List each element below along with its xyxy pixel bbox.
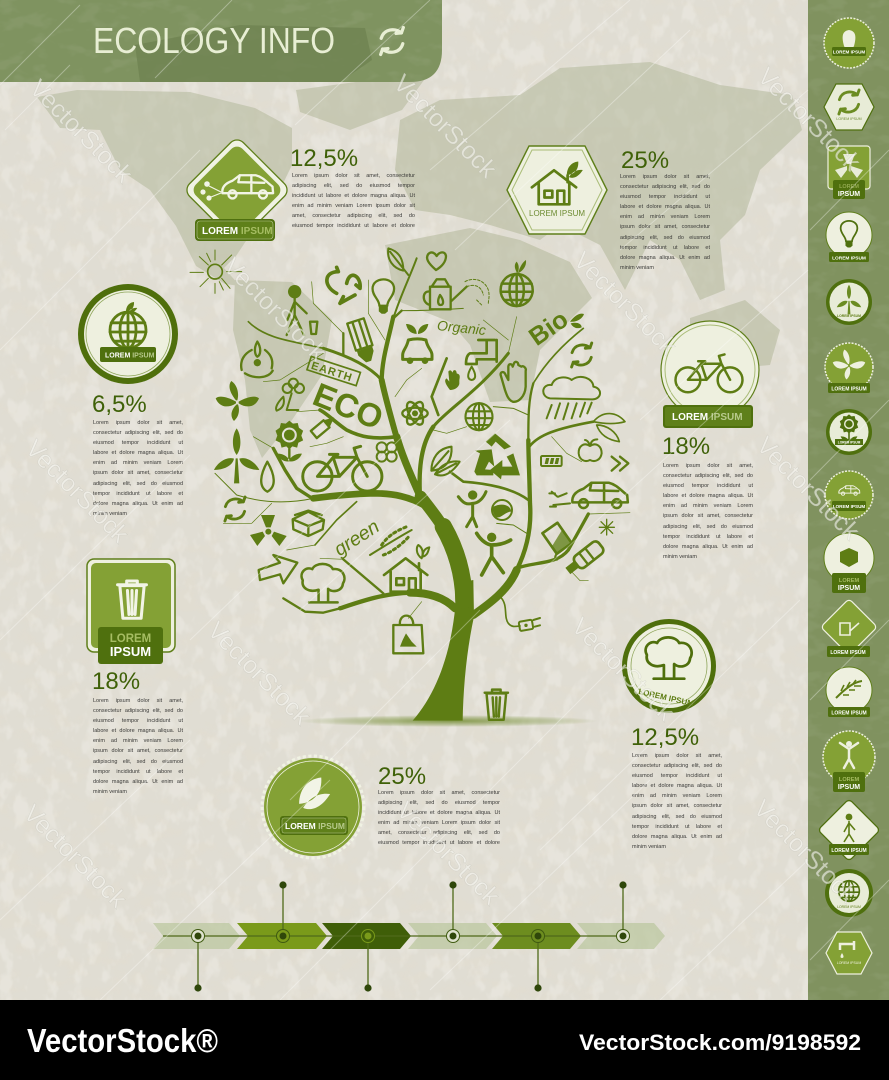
icon: plug: [501, 597, 540, 631]
icon: recycle three leaves: [241, 342, 273, 377]
text: enim ad minim veniam Lorem: [632, 793, 722, 799]
sidebar badge: flower ring: [826, 409, 872, 455]
stat: 25% bottom: 25%: [378, 763, 426, 790]
icon: apple: [579, 439, 602, 461]
badge: leaves seal: [262, 756, 364, 858]
icon: bicycle: [676, 354, 742, 392]
text: dolore magna aliqua. Ut enim ad: [93, 779, 183, 785]
label: IPSUM: [110, 644, 151, 659]
icon: atom flower: [402, 400, 428, 427]
sidebar badge: globe ring: LOREM IPSUM: [837, 905, 861, 909]
text: eiusmod tempor incididunt ut: [632, 773, 722, 779]
watermark overlay: VectorStock: [391, 796, 505, 911]
text: adipiscing elit, sed do eiusmod: [632, 814, 722, 820]
icon: butterfly: [216, 381, 259, 421]
header panel: [0, 0, 442, 82]
text: enim ad minim veniam Lorem: [620, 214, 710, 220]
badge: globe circle: [78, 284, 178, 384]
sidebar badge: recycle hexagon: [824, 84, 874, 130]
icon: box: [293, 511, 324, 536]
icon: recycle triangle: [474, 433, 520, 479]
watermark overlay: VectorStock: [568, 246, 682, 361]
text: minim veniam: [93, 511, 127, 517]
text: adipiscing elit, sed do eiusmod: [663, 524, 753, 530]
watermark overlay: VectorStock: [24, 74, 138, 189]
text: ipsum dolor sit amet, consectetur: [632, 803, 722, 809]
sidebar badge: faucet hexagon: [826, 932, 872, 974]
icon: house: [384, 558, 427, 592]
stat: 6,5%: [92, 391, 183, 517]
icon: car: [222, 175, 273, 198]
text: Lorem ipsum dolor sit amet,: [93, 698, 183, 704]
label: [98, 627, 163, 664]
icon: yin yang: [492, 500, 512, 520]
icon: bicycle: [303, 446, 382, 491]
stat: 25% top: [620, 147, 710, 271]
icon: chevrons: [612, 457, 628, 471]
sidebar badge: leaf circle: [826, 667, 872, 717]
text: ipsum dolor sit amet, consectetur: [663, 513, 753, 519]
text: Lorem ipsum dolor sit amet, consectetur: [292, 173, 415, 179]
icon: leaves: [431, 447, 460, 475]
sidebar badge: globe ring: [825, 869, 873, 917]
text: Organic: Organic: [436, 317, 487, 338]
text: Bio: Bio: [524, 305, 574, 352]
icon: globe with apple leaf: [501, 260, 533, 306]
text: dolore magna aliqua. Ut enim ad: [93, 501, 183, 507]
sidebar panel: [808, 0, 889, 1000]
icon: branch leaves: [593, 414, 625, 442]
sidebar badge: box circle: IPSUM: [838, 585, 860, 592]
text: enim ad minim veniam Lorem: [93, 460, 183, 466]
text: incididunt ut labore et dolore magna aliqua. Ut: [292, 193, 415, 199]
text: labore et dolore magna aliqua. Ut: [632, 783, 722, 789]
stamp: EARTH: [307, 356, 360, 386]
icon: house: [532, 170, 576, 204]
sidebar badge: butterfly seal: [825, 343, 873, 393]
icon: pencil: [311, 414, 337, 438]
icon: battery roll: [563, 540, 605, 577]
badge: house hexagon: [507, 146, 607, 234]
label: LOREM: [110, 633, 151, 645]
text: eiusmod tempor incididunt ut labore et dolore: [378, 840, 500, 846]
icon: radiation: [250, 515, 287, 546]
watermark overlay: VectorStock: [20, 434, 134, 549]
icon: solid hand: [445, 370, 460, 390]
text: tempor incididunt ut labore et: [620, 245, 710, 251]
icon: drop: [261, 462, 274, 492]
text: enim ad minim veniam Lorem ipsum dolor sit: [292, 203, 415, 209]
stat: 12,5% bottom: [631, 724, 722, 850]
text: incididunt ut labore et dolore magna aliqua. Ut: [378, 810, 500, 816]
sidebar badge: bulb circle: LOREM IPSUM: [832, 256, 866, 262]
label: LOREM IPSUM: [105, 352, 155, 360]
sidebar badge: car seal: LOREM IPSUM: [833, 504, 865, 509]
text: labore et dolore magna aliqua. Ut: [93, 450, 183, 456]
icon: heart: [427, 252, 446, 270]
text: tempor incididunt ut labore et: [663, 534, 753, 540]
tree trunk and branches: [215, 258, 630, 721]
badge: tree circle: [622, 619, 716, 713]
icon: flowers: [549, 492, 570, 507]
icon: leaf: [126, 302, 137, 314]
icon: globe: [110, 312, 146, 348]
text: Lorem ipsum dolor sit amet,: [663, 463, 753, 469]
icon: sun: [190, 250, 242, 293]
sidebar badge: faucet hexagon: LOREM IPSUM: [837, 961, 861, 965]
text: enim ad minim veniam Lorem: [93, 738, 183, 744]
icon: trash can: [485, 690, 508, 720]
icon: person dancing: [477, 533, 511, 575]
sidebar badge: flower ring: LOREM IPSUM: [838, 441, 861, 445]
icon: watering can: [424, 279, 467, 309]
stat: 18% left: 18%: [92, 668, 140, 695]
stat: 25% top: 25%: [621, 147, 669, 174]
text: consectetur adipiscing elit, sed do: [93, 708, 183, 714]
text: adipiscing elit, sed do eiusmod tempor: [292, 183, 415, 189]
text: minim veniam: [663, 554, 697, 560]
stat: 6,5%: 6,5%: [92, 391, 147, 418]
sidebar badge: recycle hexagon: LOREM IPSUM: [836, 117, 862, 121]
watermark overlay: VectorStock: [751, 431, 865, 546]
icon: arrow: [259, 555, 297, 583]
text: consectetur adipiscing elit, sed do: [663, 473, 753, 479]
icon: recycle heart: [327, 267, 360, 303]
icon: recycle arrows: [381, 28, 403, 54]
text: consectetur adipiscing elit, sed do: [632, 763, 722, 769]
stat: 18% right: 18%: [662, 433, 710, 460]
icon: tree: [646, 637, 692, 679]
text: labore et dolore magna aliqua. Ut: [93, 728, 183, 734]
icon: globe small: [465, 403, 492, 430]
text: amet, consectetur adipiscing elit, sed do: [292, 213, 415, 219]
stat: 12,5% top: [290, 145, 415, 229]
text: tempor incididunt ut labore et: [93, 769, 183, 775]
text: dolore magna aliqua. Ut enim ad: [620, 255, 710, 261]
text: minim veniam: [620, 265, 654, 271]
sidebar badge: box circle: LOREM: [839, 578, 859, 584]
text: adipiscing elit, sed do eiusmod tempor: [378, 800, 500, 806]
icon: clover: [377, 442, 397, 462]
text: Lorem ipsum dolor sit amet,: [93, 420, 183, 426]
text: green: green: [331, 516, 384, 561]
sidebar badge: bulb circle: [826, 212, 872, 262]
icon: bulb: [373, 279, 394, 314]
text: adipiscing elit, sed do eiusmod: [620, 235, 710, 241]
text: eiusmod tempor incididunt ut: [93, 718, 183, 724]
icon: leaves: [299, 778, 330, 809]
nodes: [192, 930, 630, 942]
sidebar badge: car seal: [825, 471, 873, 519]
sidebar badge: box circle: [824, 533, 874, 593]
watermark overlay: VectorStock: [748, 794, 862, 909]
icon: rain cloud: [543, 377, 600, 419]
icon: sunflower: [276, 421, 303, 461]
icon: person arms up: [458, 490, 486, 527]
text: Lorem ipsum dolor sit amet,: [632, 753, 722, 759]
sidebar badge: hand seal: [824, 18, 874, 68]
icon: recycle small: [225, 497, 245, 521]
icon: flower: [276, 379, 304, 411]
icon: leaves: [567, 162, 583, 178]
icon: fern: [370, 527, 412, 555]
icon: star burst: [599, 519, 614, 535]
icon: recycle circle: [572, 343, 592, 367]
stamp: EARTH: EARTH: [310, 360, 354, 385]
sidebar badge: person seal: IPSUM: [838, 784, 860, 791]
icon: open hand: [501, 362, 526, 402]
text: consectetur adipiscing elit, sed do: [620, 184, 710, 190]
text: dolore magna aliqua. Ut enim ad: [632, 834, 722, 840]
text: ipsum dolor sit amet, consectetur: [93, 748, 183, 754]
text: labore et dolore magna aliqua. Ut: [620, 204, 710, 210]
icon: energy saving bulb: [347, 318, 377, 364]
sidebar badge: person seal: [823, 731, 875, 792]
text: Lorem ipsum dolor sit amet, consectetur: [378, 790, 500, 796]
sidebar badge: radiation square: LOREM: [839, 184, 859, 190]
badge: car diamond: [183, 136, 291, 244]
text: adipiscing elit, sed do eiusmod: [93, 481, 183, 487]
node dots: [194, 881, 627, 992]
stat: 12,5% bottom: 12,5%: [631, 724, 699, 751]
text: minim veniam: [632, 844, 666, 850]
text: tempor incididunt ut labore et: [93, 491, 183, 497]
text: eiusmod tempor incididunt ut: [663, 483, 753, 489]
text: eiusmod tempor incididunt ut: [620, 194, 710, 200]
watermark overlay: VectorStock: [18, 799, 132, 914]
icon: flowers: [200, 181, 221, 201]
sidebar badge: person diamond: LOREM IPSUM: [831, 848, 867, 854]
sidebar badge: person seal: LOREM: [839, 777, 859, 783]
footer url: VectorStock.com/9198592: [579, 1030, 861, 1055]
text: labore et dolore magna aliqua. Ut: [663, 493, 753, 499]
text: minim veniam: [93, 789, 127, 795]
icon: faucet: [466, 340, 497, 364]
watermark overlay: VectorStock: [202, 616, 316, 731]
label: LOREM IPSUM: [672, 412, 743, 423]
icon: shopping bag: [393, 616, 423, 653]
footer brand: VectorStock®: [27, 1022, 218, 1059]
text: ipsum dolor sit amet, consectetur: [93, 470, 183, 476]
icon: water drop: [468, 367, 475, 380]
sidebar badge: radiation square: IPSUM: [838, 191, 860, 198]
text: consectetur adipiscing elit, sed do: [93, 430, 183, 436]
stat: 18% left: [92, 668, 183, 795]
sidebar badge: radiation square: [828, 146, 870, 199]
title: ECOLOGY INFO: [93, 20, 335, 61]
icon: trash: [118, 581, 146, 618]
icon: car: [572, 483, 628, 508]
icon: eco car: [403, 324, 432, 364]
watermark overlay: VectorStock: [388, 69, 502, 184]
sidebar badge: turbine ring: [826, 279, 872, 325]
sidebar badge: butterfly seal: LOREM IPSUM: [831, 386, 867, 392]
text: ipsum dolor sit amet, consectetur: [620, 224, 710, 230]
text: adipiscing elit, sed do eiusmod: [93, 759, 183, 765]
text: tempor incididunt ut labore et: [632, 824, 722, 830]
text: enim ad minim veniam Lorem ipsum dolor sit: [378, 820, 500, 826]
text: Lorem ipsum dolor sit amet,: [620, 174, 710, 180]
icon: leaf: [388, 248, 408, 275]
curved label: LOREM IPSUM: [638, 687, 695, 708]
icon: small leaf: [417, 545, 429, 558]
watermark overlay: VectorStock: [752, 62, 866, 177]
icon: person with cup: [287, 285, 317, 335]
label: LOREM IPSUM: [285, 821, 345, 831]
badge: trash square: [87, 559, 175, 664]
world map: [37, 62, 802, 458]
sidebar badge: leaf circle: LOREM IPSUM: [831, 710, 867, 716]
text: ECO: ECO: [308, 376, 388, 438]
icon: battery: [541, 456, 562, 466]
stat: 25% bottom: [378, 763, 500, 846]
sidebar badge: watering can diamond: [821, 599, 877, 657]
sidebar badge: watering can diamond: LOREM IPSUM: [830, 650, 866, 656]
ground shadow: [298, 715, 598, 727]
icon: wind turbine: [214, 428, 259, 483]
text: enim ad minim veniam Lorem: [663, 503, 753, 509]
watermark overlay: VectorStock: [218, 252, 332, 367]
icon: fuel pump: [539, 523, 575, 560]
stat: 18% right: [662, 433, 753, 560]
text: amet, consectetur adipiscing elit, sed do: [378, 830, 500, 836]
sidebar badge: person diamond: [818, 799, 880, 861]
sidebar badge: hand seal: LOREM IPSUM: [833, 50, 865, 54]
text: dolore magna aliqua. Ut enim ad: [663, 544, 753, 550]
label: LOREM IPSUM: [202, 226, 273, 237]
label: LOREM IPSUM: [529, 209, 585, 218]
text: eiusmod tempor incididunt ut: [93, 440, 183, 446]
icon: water spray: [465, 279, 489, 305]
stat: 12,5% top: 12,5%: [290, 145, 358, 172]
sidebar badge: turbine ring: LOREM IPSUM: [837, 314, 861, 318]
watermark overlay: VectorStock: [566, 612, 680, 727]
badge: bicycle circle: [661, 321, 759, 428]
text: eiusmod tempor incididunt ut labore et dolore: [292, 223, 415, 229]
connector lines: [163, 885, 623, 988]
icon: tree: [302, 564, 344, 602]
arrow segments: [153, 923, 665, 949]
